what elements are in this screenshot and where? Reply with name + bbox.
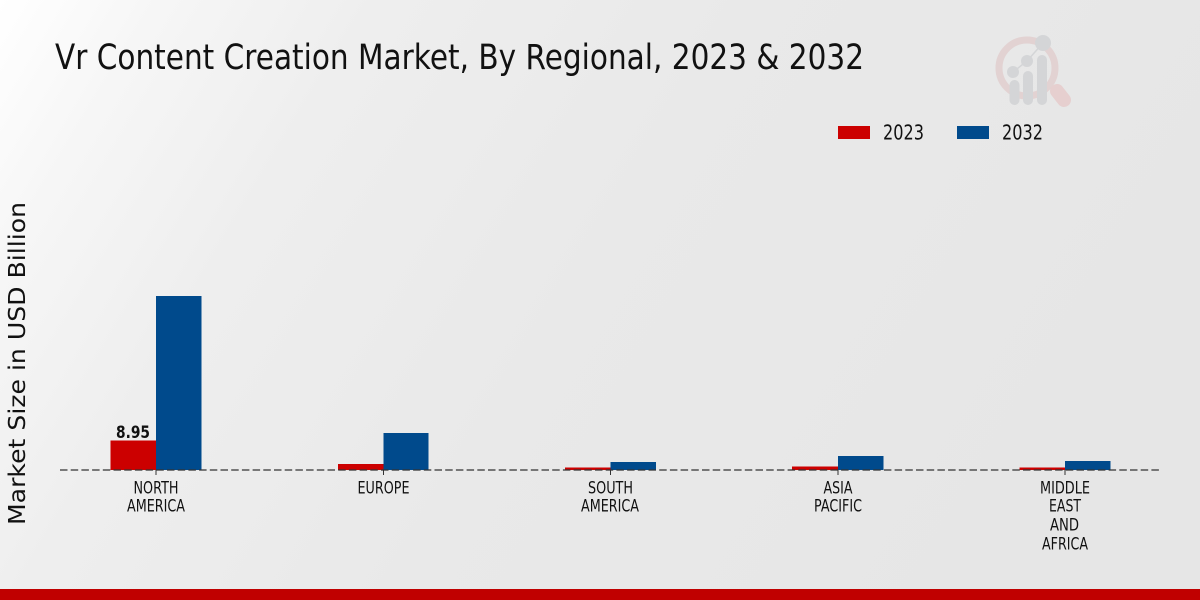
category label: Middle East and Africa: MIDDLE xyxy=(1040,478,1090,498)
bars: Middle East and Africa xyxy=(1020,461,1110,470)
category label: Asia Pacific: PACIFIC xyxy=(814,496,862,516)
legend xyxy=(838,120,1043,144)
legend item: 2023: 2023 xyxy=(883,120,924,144)
category label: North America: NORTH xyxy=(134,478,178,498)
bars: North America xyxy=(110,296,202,470)
category label: South America: AMERICA xyxy=(581,496,640,516)
axis ticks xyxy=(156,470,1065,475)
bars: Asia Pacific xyxy=(792,456,884,470)
category label: Asia Pacific xyxy=(814,478,862,516)
bars: Europe xyxy=(338,433,428,470)
bars: South America xyxy=(565,462,656,470)
category label: Middle East and Africa: AFRICA xyxy=(1042,534,1089,554)
y-axis label: Market Size in USD Billion xyxy=(5,202,31,525)
category label: Middle East and Africa: AND xyxy=(1050,516,1079,534)
category label: South America xyxy=(581,478,640,516)
footer bar xyxy=(0,589,1200,600)
category label: Europe: EUROPE xyxy=(358,478,410,498)
legend item: 2032: 2032 xyxy=(1002,120,1043,144)
icon: watermark logo xyxy=(999,35,1064,105)
category label: North America xyxy=(127,478,186,516)
baseline xyxy=(60,469,1160,471)
data label: 8.95: 8.95 xyxy=(116,423,150,443)
category label: North America: AMERICA xyxy=(127,496,186,516)
bar chart xyxy=(60,296,1160,475)
category label: Middle East and Africa xyxy=(1040,478,1090,554)
category label: South America: SOUTH xyxy=(588,478,633,498)
title: Vr Content Creation Market, By Regional, 2023 & 2032 xyxy=(55,38,864,78)
category label: Middle East and Africa: EAST xyxy=(1049,496,1082,516)
legend item: 2023 xyxy=(838,120,924,144)
legend item: 2032 xyxy=(957,120,1043,144)
category label: Asia Pacific: ASIA xyxy=(824,478,853,498)
